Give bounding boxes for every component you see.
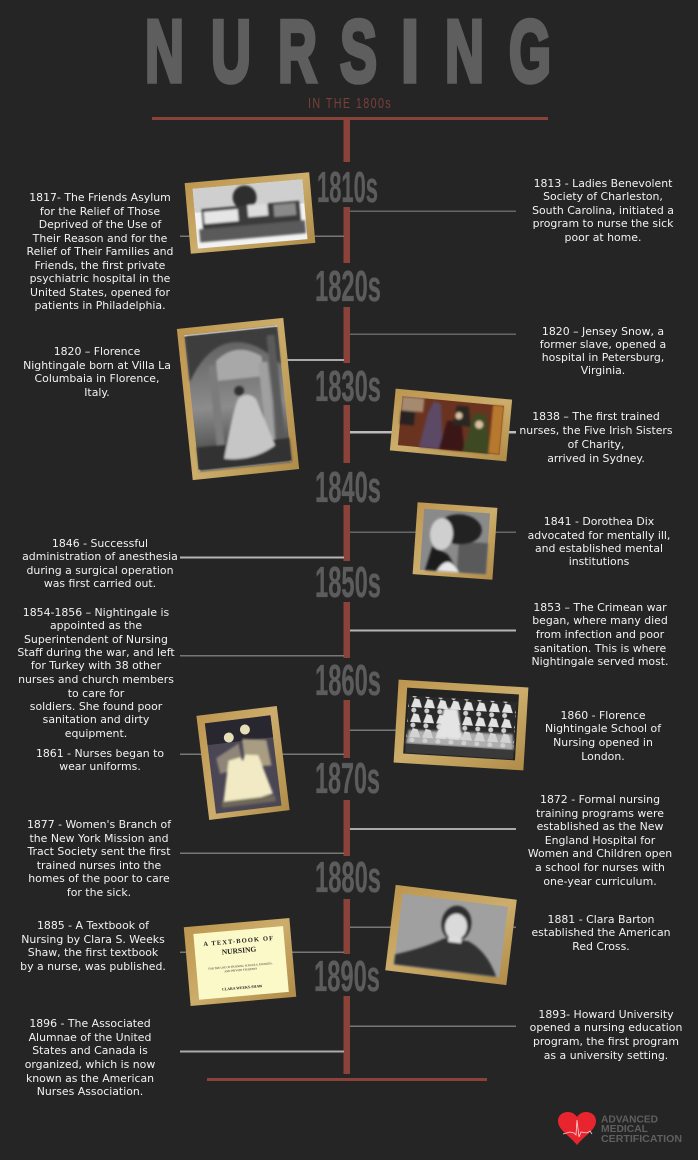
event: 1820 Nightingale born bbox=[23, 345, 171, 399]
event: 1813 Ladies Benevolent Society: Society of Charleston, bbox=[543, 190, 663, 203]
event: 1846 anesthesia: during a surgical operation bbox=[27, 564, 173, 577]
event: 1860 Nightingale School bbox=[545, 709, 662, 763]
title: N bbox=[145, 2, 184, 101]
photo: nursing textbook cover: FOR THE USE OF TRAINING SCHOOLS, FAMILIES, bbox=[208, 962, 273, 971]
event: 1817 Friends Asylum: psychiatric hospital in the bbox=[30, 272, 171, 285]
icon: heart with ECG trace bbox=[558, 1112, 596, 1145]
event: 1896 Associated Alumnae: organized, which is now bbox=[25, 1058, 155, 1071]
event: 1893 Howard University: opened a nursing education bbox=[530, 1021, 682, 1034]
decade labels: 1810s bbox=[317, 164, 378, 212]
event: 1881 Clara Barton: 1881 - Clara Barton bbox=[548, 913, 654, 926]
title: G bbox=[509, 2, 551, 101]
event: 1854-1856 Nightingale superintendent: nurses and church members bbox=[18, 673, 174, 686]
decade labels: 1850s bbox=[315, 559, 381, 607]
title: I bbox=[401, 2, 419, 101]
event: 1896 Associated Alumnae: Alumnae of the United bbox=[29, 1031, 151, 1044]
event: 1817 Friends Asylum: 1817- The Friends Asylum bbox=[29, 191, 171, 204]
decade labels bbox=[314, 164, 381, 1001]
left events bbox=[17, 191, 178, 1098]
event: 1841 Dorothea Dix: advocated for mentally ill, bbox=[528, 529, 670, 542]
event: 1872 training programs: England Hospital for bbox=[545, 834, 656, 847]
event: 1872 training programs: 1872 - Formal nursing bbox=[540, 793, 660, 806]
photo: nursing textbook cover: NURSING bbox=[221, 945, 257, 957]
event: 1813 Ladies Benevolent Society: poor at home. bbox=[565, 231, 641, 244]
event: 1885 textbook: Nursing by Clara S. Weeks bbox=[21, 933, 165, 946]
event: 1820 Jensey Snow: 1820 – Jensey Snow, a bbox=[542, 325, 664, 338]
photo: Florence Nightingale bbox=[177, 318, 299, 480]
event: 1846 anesthesia bbox=[22, 537, 178, 590]
event: 1896 Associated Alumnae bbox=[25, 1017, 155, 1098]
event: 1872 training programs: a school for nurses with bbox=[535, 861, 665, 874]
event: 1896 Associated Alumnae: Nurses Association. bbox=[37, 1085, 143, 1098]
event: 1817 Friends Asylum bbox=[27, 191, 173, 312]
event: 1846 anesthesia: 1846 - Successful bbox=[52, 537, 148, 550]
event: 1853 Crimean war: from infection and poor bbox=[536, 628, 665, 641]
event: 1817 Friends Asylum: patients in Philadelphia. bbox=[34, 299, 166, 312]
event: 1841 Dorothea Dix: 1841 - Dorothea Dix bbox=[544, 515, 655, 528]
photo: Nightingale School nurses bbox=[394, 680, 528, 770]
event: 1881 Clara Barton: established the American bbox=[531, 926, 671, 939]
logo: Advanced Medical Certification: CERTIFICATION bbox=[601, 1133, 682, 1145]
event: 1817 Friends Asylum: Deprived of the Use of bbox=[39, 218, 162, 231]
event: 1853 Crimean war: sanitation. This is where bbox=[534, 642, 666, 655]
photo: Dorothea Dix bbox=[413, 502, 497, 580]
event: 1896 Associated Alumnae: States and Canada is bbox=[32, 1044, 148, 1057]
event: 1813 Ladies Benevolent Society: South Carolina, initiated a bbox=[532, 204, 674, 217]
event: 1838 Irish Sisters: of Charity, bbox=[568, 438, 624, 451]
event: 1896 Associated Alumnae: 1896 - The Associated bbox=[29, 1017, 151, 1030]
event: 1877 Women's Branch: for the sick. bbox=[67, 886, 131, 899]
event: 1817 Friends Asylum: Their Reason and for the bbox=[32, 232, 168, 245]
event: 1846 anesthesia: administration of anesthesia bbox=[22, 550, 178, 563]
right events bbox=[519, 177, 682, 1062]
event: 1893 Howard University: program, the first program bbox=[533, 1035, 679, 1048]
event: 1817 Friends Asylum: United States, opened for bbox=[30, 286, 170, 299]
photo: nurses in uniform bbox=[196, 706, 290, 820]
event: 1885 textbook bbox=[20, 919, 166, 973]
event: 1881 Clara Barton bbox=[531, 913, 671, 953]
event: 1853 Crimean war: Nightingale served most. bbox=[531, 655, 669, 668]
event: 1846 anesthesia: was first carried out. bbox=[44, 577, 156, 590]
logo: Advanced Medical Certification bbox=[558, 1112, 682, 1145]
event: 1817 Friends Asylum: Friends, the first private bbox=[35, 259, 166, 272]
event: 1853 Crimean war: began, where many died bbox=[532, 614, 668, 627]
event: 1820 Nightingale born: Columbaia in Florence, bbox=[35, 372, 159, 385]
decade labels: 1840s bbox=[315, 464, 381, 512]
event: 1885 textbook: by a nurse, was published. bbox=[20, 960, 166, 973]
logo: Advanced Medical Certification: MEDICAL bbox=[601, 1123, 649, 1135]
event: 1854-1856 Nightingale superintendent: sanitation and dirty bbox=[43, 713, 150, 726]
photo: nursing textbook cover: CLARA WEEKS-SHAW bbox=[222, 984, 263, 992]
event: 1820 Nightingale born: Nightingale born at Villa La bbox=[23, 359, 171, 372]
event: 1820 Jensey Snow bbox=[540, 325, 666, 377]
decade labels: 1860s bbox=[315, 657, 381, 705]
title: S bbox=[340, 2, 377, 101]
title: U bbox=[211, 2, 251, 101]
event: 1893 Howard University: 1893- Howard University bbox=[538, 1008, 674, 1021]
event: 1877 Women's Branch: the New York Mission and bbox=[30, 832, 168, 845]
event: 1841 Dorothea Dix bbox=[528, 515, 670, 568]
event: 1817 Friends Asylum: Relief of Their Families and bbox=[27, 245, 173, 258]
event: 1872 training programs: established as the New bbox=[537, 820, 664, 833]
event: 1854-1856 Nightingale superintendent: appointed as the bbox=[50, 619, 142, 632]
event: 1838 Irish Sisters: nurses, the Five Irish Sisters bbox=[519, 424, 673, 437]
decade labels: 1870s bbox=[315, 755, 380, 803]
event: 1853 Crimean war bbox=[531, 601, 669, 668]
event: 1820 Jensey Snow: former slave, opened a bbox=[540, 338, 666, 351]
event: 1885 textbook: Shaw, the first textbook bbox=[28, 946, 159, 959]
event: 1841 Dorothea Dix: and established mental bbox=[535, 542, 663, 555]
event: 1877 Women's Branch bbox=[26, 818, 172, 899]
logo: Advanced Medical Certification: ADVANCED bbox=[601, 1114, 658, 1126]
event: 1861 uniforms: 1861 - Nurses began to bbox=[36, 747, 164, 760]
event: 1893 Howard University bbox=[530, 1008, 682, 1062]
event: 1877 Women's Branch: trained nurses into the bbox=[37, 859, 162, 872]
photo: nursing textbook cover bbox=[184, 918, 296, 1006]
event: 1820 Jensey Snow: Virginia. bbox=[581, 364, 625, 377]
decade labels: 1830s bbox=[315, 363, 381, 411]
event: 1854-1856 Nightingale superintendent: 1854-1856 – Nightingale is bbox=[23, 606, 170, 619]
event: 1813 Ladies Benevolent Society: 1813 - Ladies Benevolent bbox=[534, 177, 673, 190]
event: 1872 training programs: Women and Children open bbox=[528, 847, 672, 860]
event: 1860 Nightingale School: 1860 - Florence bbox=[560, 709, 646, 722]
event: 1854-1856 Nightingale superintendent: Staff during the war, and left bbox=[17, 646, 175, 659]
event: 1854-1856 Nightingale superintendent: to care for bbox=[68, 687, 125, 700]
event: 1896 Associated Alumnae: known as the American bbox=[26, 1072, 154, 1085]
connector lines bbox=[180, 210, 516, 1052]
event: 1820 Nightingale born: 1820 – Florence bbox=[54, 345, 141, 358]
event: 1817 Friends Asylum: for the Relief of Those bbox=[40, 205, 160, 218]
photo: Irish Sisters of Charity bbox=[390, 389, 512, 461]
title: R bbox=[278, 2, 317, 101]
event: 1838 Irish Sisters: 1838 – The first trained bbox=[532, 410, 660, 423]
event: 1872 training programs: training programs were bbox=[536, 807, 664, 820]
event: 1872 training programs: one-year curriculum. bbox=[543, 875, 657, 888]
event: 1838 Irish Sisters bbox=[519, 410, 673, 465]
event: 1881 Clara Barton: Red Cross. bbox=[572, 940, 630, 953]
event: 1877 Women's Branch: 1877 - Women's Branch of bbox=[27, 818, 172, 831]
event: 1860 Nightingale School: Nursing opened in bbox=[553, 736, 653, 749]
photo: nursing textbook cover: AND PRIVATE STUDENTS bbox=[224, 968, 258, 973]
event: 1854-1856 Nightingale superintendent: soldiers. She found poor bbox=[30, 700, 163, 713]
event: 1877 Women's Branch: homes of the poor to care bbox=[28, 872, 170, 885]
event: 1861 uniforms bbox=[36, 747, 164, 773]
photo: Clara Barton bbox=[385, 885, 517, 985]
timeline spine bbox=[152, 117, 548, 1081]
title bbox=[145, 2, 551, 101]
event: 1820 Nightingale born: Italy. bbox=[84, 386, 110, 399]
decade labels: 1890s bbox=[314, 953, 380, 1001]
title: N bbox=[445, 2, 484, 101]
decade labels: 1820s bbox=[315, 263, 381, 311]
event: 1813 Ladies Benevolent Society: program to nurse the sick bbox=[533, 217, 674, 230]
event: 1893 Howard University: as a university setting. bbox=[544, 1049, 668, 1062]
event: 1813 Ladies Benevolent Society bbox=[532, 177, 674, 244]
event: 1854-1856 Nightingale superintendent: Superintendent of Nursing bbox=[24, 633, 168, 646]
event: 1860 Nightingale School: Nightingale School of bbox=[545, 722, 662, 735]
event: 1820 Jensey Snow: hospital in Petersburg, bbox=[542, 351, 664, 364]
photo: asylum building bbox=[185, 172, 315, 254]
event: 1877 Women's Branch: Tract Society sent the first bbox=[26, 845, 171, 858]
event: 1838 Irish Sisters: arrived in Sydney. bbox=[547, 452, 645, 465]
event: 1853 Crimean war: 1853 – The Crimean war bbox=[533, 601, 667, 614]
event: 1872 training programs bbox=[528, 793, 672, 888]
event: 1841 Dorothea Dix: institutions bbox=[569, 555, 630, 568]
event: 1860 Nightingale School: London. bbox=[581, 750, 625, 763]
event: 1854-1856 Nightingale superintendent: equipment. bbox=[65, 727, 127, 740]
event: 1854-1856 Nightingale superintendent bbox=[17, 606, 175, 740]
event: 1861 uniforms: wear uniforms. bbox=[59, 760, 141, 773]
subtitle: IN THE 1800s bbox=[308, 94, 391, 111]
decade labels: 1880s bbox=[315, 854, 381, 902]
event: 1854-1856 Nightingale superintendent: for Turkey with 38 other bbox=[31, 659, 162, 672]
photo: nursing textbook cover: A TEXT-BOOK OF bbox=[203, 935, 273, 948]
event: 1885 textbook: 1885 - A Textbook of bbox=[37, 919, 150, 932]
